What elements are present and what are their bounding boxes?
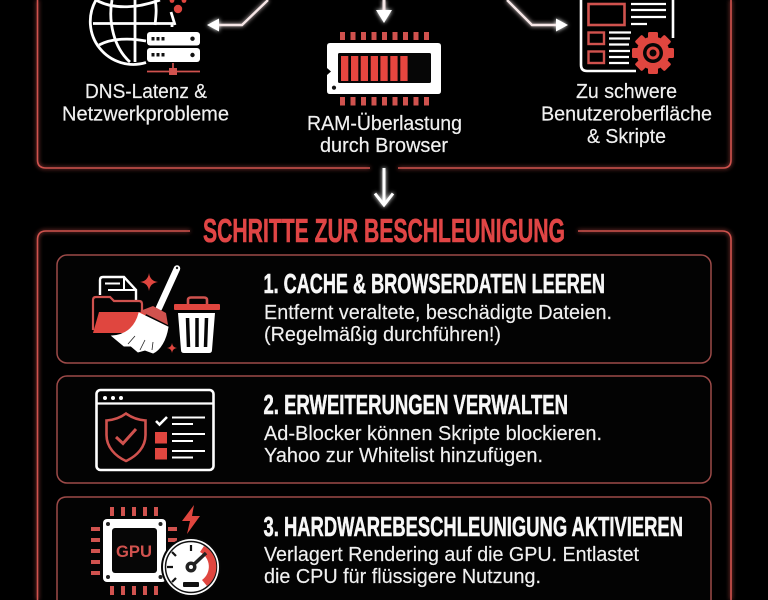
label: RAM: durch Browser [320, 135, 448, 157]
step 2 text [264, 423, 602, 467]
label: RAM [307, 113, 462, 157]
arrow: to DNS [207, 0, 268, 32]
icon: globe and server [90, 0, 200, 75]
icon: GPU chip with gauge: GPU [116, 542, 152, 561]
step 2 text: Yahoo zur Whitelist hinzufügen. [264, 445, 543, 467]
step 3 text [264, 544, 639, 588]
card: step 1 [57, 255, 711, 363]
icon: heavy interface with gear [581, 0, 674, 74]
label: DNS: DNS-Latenz & [85, 81, 208, 103]
step 1 text [264, 302, 612, 346]
step 2 text: Ad-Blocker können Skripte blockieren. [264, 423, 602, 445]
label: RAM: RAM-Überlastung [307, 113, 462, 135]
panel: causes [38, 0, 731, 168]
arrow: to UI [507, 0, 568, 32]
step 1 text: (Regelmäßig durchführen!) [264, 324, 501, 346]
label: DNS: Netzwerkprobleme [62, 104, 229, 126]
step 2 title: 2. ERWEITERUNGEN VERWALTEN [264, 389, 568, 420]
panel: steps [38, 212, 731, 600]
label: DNS [62, 81, 229, 126]
card: step 3 [57, 497, 711, 600]
label: interface: Benutzeroberfläche [541, 104, 712, 126]
arrow: to RAM [376, 0, 392, 23]
label: interface: Zu schwere [576, 81, 677, 103]
icon: folder, broom and bin [93, 267, 220, 353]
step 3 text: die CPU für flüssigere Nutzung. [264, 566, 541, 588]
step 3 text: Verlagert Rendering auf die GPU. Entlastet [264, 544, 639, 566]
label: interface [541, 81, 712, 148]
icon: RAM module [327, 32, 441, 106]
icon: GPU chip with gauge [91, 505, 221, 597]
heading: steps: SCHRITTE ZUR BESCHLEUNIGUNG [203, 212, 565, 249]
arrow: causes to steps [375, 168, 393, 205]
step 1 text: Entfernt veraltete, beschädigte Dateien. [264, 302, 612, 324]
step 1 title: 1. CACHE & BROWSERDATEN LEEREN [264, 268, 605, 299]
card: step 2 [57, 376, 711, 483]
label: interface: & Skripte [587, 126, 666, 148]
icon: browser window with shield [96, 390, 214, 470]
